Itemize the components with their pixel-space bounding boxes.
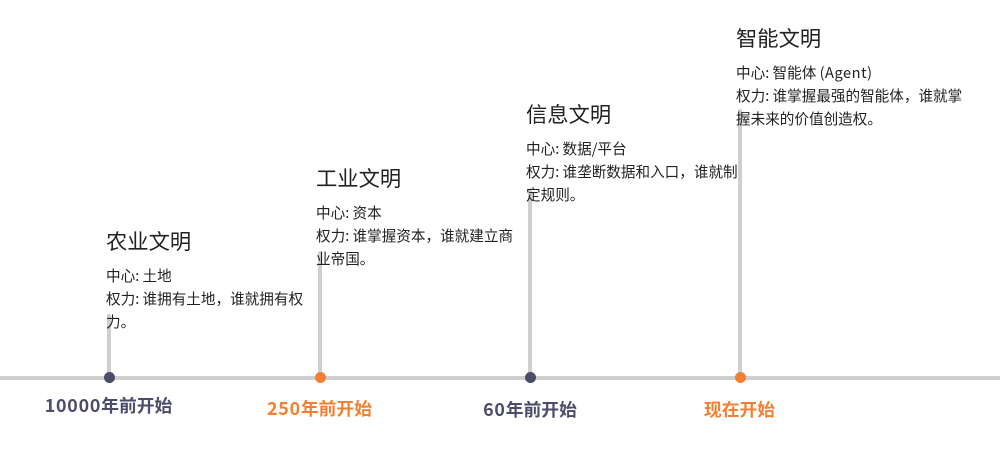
text: intelligent civilization — [736, 62, 962, 129]
text: agricultural civilization: 中心: 土地 — [106, 265, 172, 286]
label: 10000 years ago: 10000年前开始 — [45, 392, 172, 418]
timeline axis — [0, 376, 1000, 380]
heading: industrial civilization: 工业文明 — [316, 162, 401, 193]
marker: agriculture — [104, 372, 115, 383]
label: 250 years ago: 250年前开始 — [267, 395, 372, 421]
text: industrial civilization: 权力: 谁掌握资本，谁就建立商业帝国。 — [316, 225, 513, 269]
text: information civilization: 中心: 数据/平台 — [526, 138, 627, 159]
text: intelligent civilization: 中心: 智能体 (Agent) — [736, 62, 873, 83]
label: now: 现在开始 — [704, 396, 775, 422]
text: industrial civilization — [316, 202, 513, 269]
panel: industrial civilization — [316, 162, 513, 269]
stem: information — [528, 188, 532, 378]
text: industrial civilization: 中心: 资本 — [316, 202, 382, 223]
text: information civilization: 权力: 谁垄断数据和入口，谁就制定规则。 — [526, 161, 738, 205]
marker: information — [524, 372, 536, 383]
panel: information civilization — [526, 98, 738, 205]
heading: agricultural civilization: 农业文明 — [106, 225, 191, 256]
marker: intelligence — [735, 372, 746, 383]
text: agricultural civilization — [106, 265, 303, 332]
label: 60 years ago: 60年前开始 — [483, 396, 577, 422]
stem: industry — [318, 251, 322, 378]
panel: agricultural civilization — [106, 225, 303, 332]
panel: intelligent civilization — [736, 22, 962, 129]
heading: intelligent civilization: 智能文明 — [736, 22, 821, 53]
stem: intelligence — [738, 109, 742, 378]
text: intelligent civilization: 权力: 谁掌握最强的智能体，谁就掌握未来的价值创造权。 — [736, 85, 962, 129]
heading: information civilization: 信息文明 — [526, 98, 611, 129]
marker: industry — [314, 372, 326, 383]
text: agricultural civilization: 权力: 谁拥有土地，谁就拥有权力。 — [106, 288, 303, 332]
text: information civilization — [526, 138, 738, 205]
stem: agriculture — [107, 314, 111, 378]
